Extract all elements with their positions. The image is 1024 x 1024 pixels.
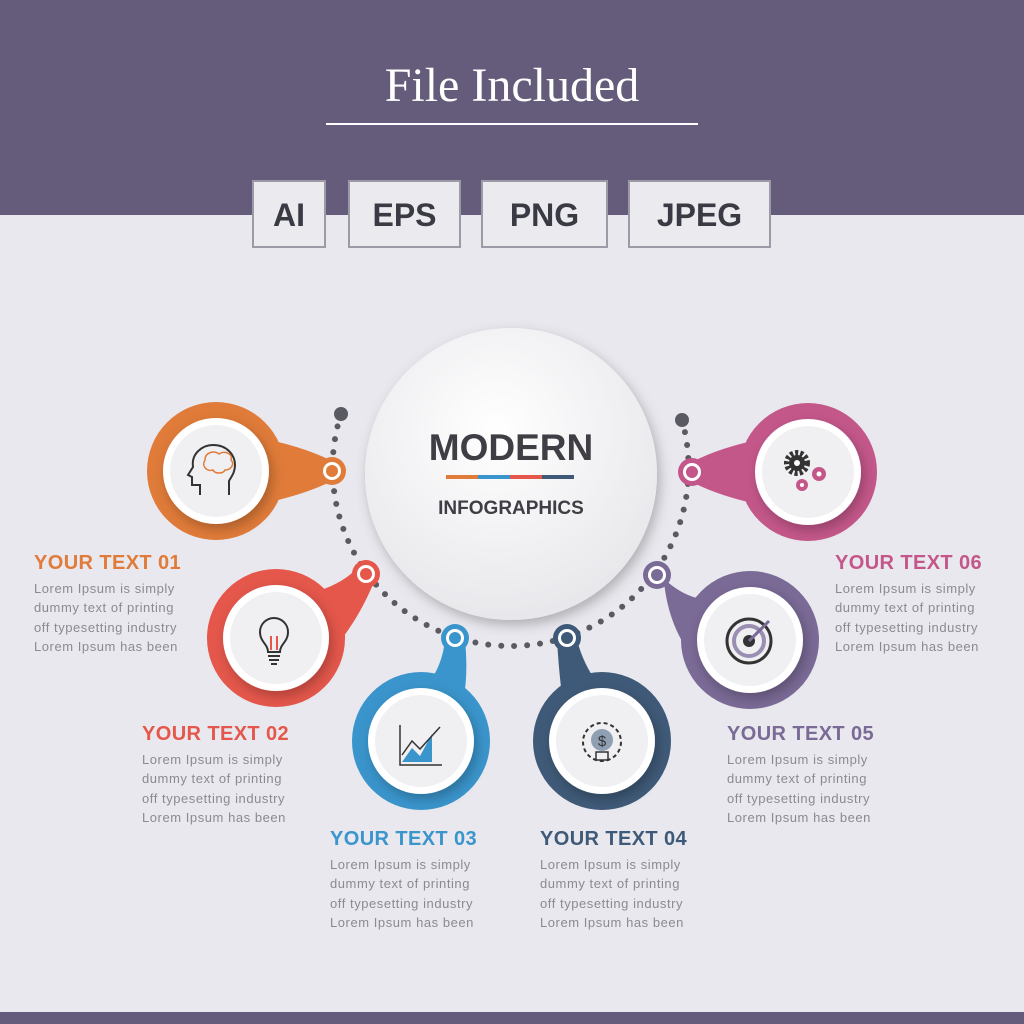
text 04: dummy text of printing — [540, 876, 680, 891]
badge PNG — [481, 180, 608, 248]
title: File Included — [385, 59, 639, 112]
text 02: off typesetting industry — [142, 791, 285, 806]
text 06: Lorem Ipsum is simply — [835, 581, 976, 596]
badge EPS — [348, 180, 461, 248]
text 01 — [34, 552, 181, 654]
text 05: Lorem Ipsum is simply — [727, 752, 868, 767]
icon: chart — [400, 725, 442, 765]
text 03: YOUR TEXT 03 — [330, 828, 477, 850]
text 05: Lorem Ipsum has been — [727, 810, 871, 825]
text 04: YOUR TEXT 04 — [540, 828, 687, 850]
icon: target — [727, 619, 771, 663]
text 05 — [727, 723, 874, 825]
center circle — [365, 328, 657, 620]
text 02: YOUR TEXT 02 — [142, 723, 289, 745]
dotted arc — [333, 414, 689, 646]
format badges — [252, 180, 771, 248]
badge JPEG: JPEG — [657, 197, 742, 233]
bottom strip — [0, 1012, 1024, 1024]
text 04: Lorem Ipsum has been — [540, 915, 684, 930]
text 06: Lorem Ipsum has been — [835, 639, 979, 654]
text 04: Lorem Ipsum is simply — [540, 857, 681, 872]
text 01: dummy text of printing — [34, 600, 174, 615]
node 05 — [643, 561, 819, 709]
text 02: dummy text of printing — [142, 771, 282, 786]
text 06: dummy text of printing — [835, 600, 975, 615]
text 06: YOUR TEXT 06 — [835, 552, 982, 574]
node 06 — [678, 403, 877, 541]
text 01: off typesetting industry — [34, 620, 177, 635]
text 01: Lorem Ipsum has been — [34, 639, 178, 654]
node 03 — [352, 624, 490, 810]
badge JPEG — [628, 180, 771, 248]
text 02: Lorem Ipsum is simply — [142, 752, 283, 767]
icon: gear bulb: $ — [598, 733, 607, 750]
text 02: Lorem Ipsum has been — [142, 810, 286, 825]
text 03: dummy text of printing — [330, 876, 470, 891]
text 03 — [330, 828, 477, 930]
text 04: off typesetting industry — [540, 896, 683, 911]
text 06 — [835, 552, 982, 654]
center circle: MODERN — [429, 427, 593, 468]
text 06: off typesetting industry — [835, 620, 978, 635]
text 04 — [540, 828, 687, 930]
node 01 — [147, 402, 346, 540]
icon: light bulb — [260, 618, 288, 664]
text 01: Lorem Ipsum is simply — [34, 581, 175, 596]
node 04 — [533, 624, 671, 810]
text 05: YOUR TEXT 05 — [727, 723, 874, 745]
badge EPS: EPS — [372, 197, 437, 233]
badge PNG: PNG — [510, 197, 579, 233]
badge AI — [252, 180, 326, 248]
icon: brain head — [188, 445, 235, 495]
header band — [0, 0, 1024, 215]
text 03: Lorem Ipsum is simply — [330, 857, 471, 872]
badge AI: AI — [273, 197, 305, 233]
text 02 — [142, 723, 289, 825]
text 05: off typesetting industry — [727, 791, 870, 806]
icon: gear bulb — [583, 723, 621, 761]
node 02 — [207, 560, 380, 707]
icon: gears — [787, 453, 826, 491]
center circle: INFOGRAPHICS — [438, 498, 584, 519]
text 03: off typesetting industry — [330, 896, 473, 911]
text 01: YOUR TEXT 01 — [34, 552, 181, 574]
text 05: dummy text of printing — [727, 771, 867, 786]
text 03: Lorem Ipsum has been — [330, 915, 474, 930]
